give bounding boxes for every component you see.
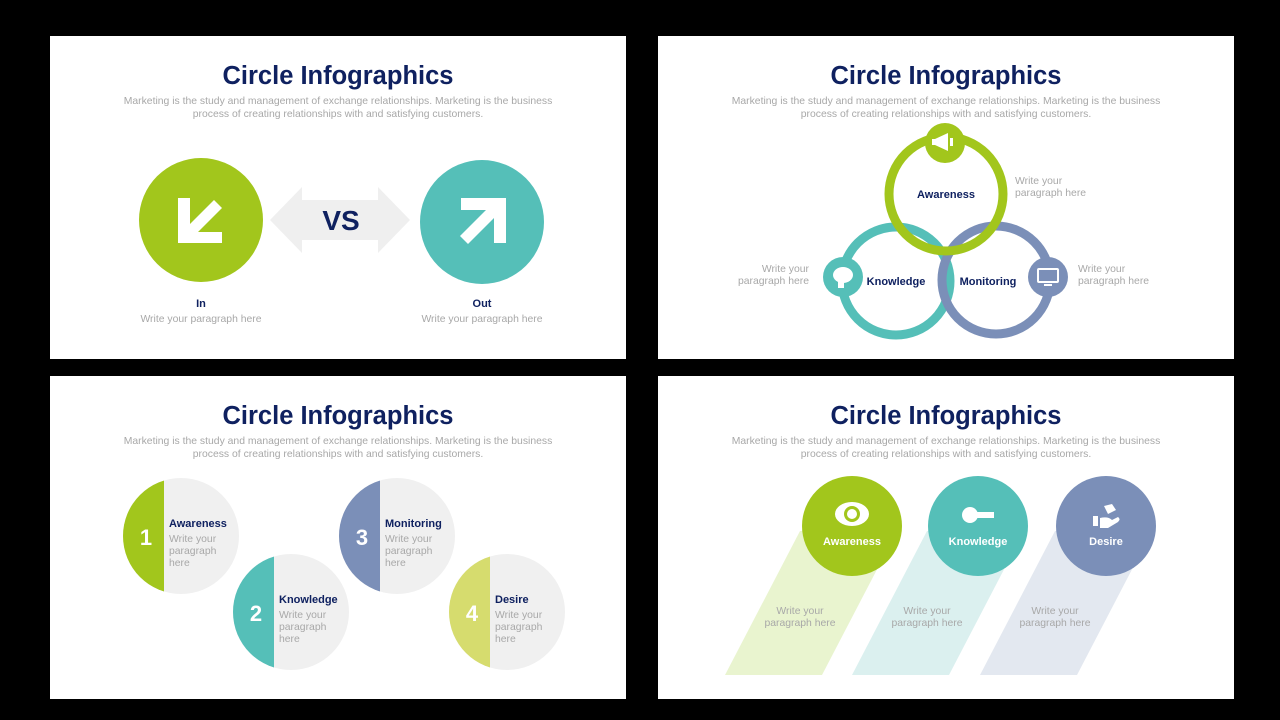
item 1: Awareness — [169, 518, 227, 530]
subtitle — [732, 96, 1160, 120]
item 4: here — [495, 634, 516, 645]
subtitle — [732, 436, 1160, 460]
item 4: 4 — [466, 601, 479, 626]
subtitle: process of creating relationships with and satisfying customers. — [801, 449, 1091, 460]
item 2 — [233, 554, 349, 670]
subtitle: process of creating relationships with and satisfying customers. — [193, 449, 483, 460]
item 2: 2 — [250, 601, 262, 626]
text: right: Write your — [1078, 264, 1126, 275]
column 2: Knowledge — [949, 536, 1007, 548]
label: out — [421, 298, 543, 325]
column 3: paragraph here — [1019, 618, 1091, 629]
item 2: Knowledge — [279, 594, 338, 606]
item 4: paragraph — [495, 622, 543, 633]
label: in: In — [196, 298, 206, 310]
subtitle: process of creating relationships with and satisfying customers. — [801, 109, 1091, 120]
ring: knowledge — [842, 227, 950, 335]
subtitle — [124, 96, 552, 120]
column 3 — [980, 476, 1156, 675]
column 2: paragraph here — [891, 618, 963, 629]
labels — [867, 189, 1016, 288]
title: Circle Infographics — [831, 62, 1061, 90]
label: out: Out — [473, 298, 492, 310]
item 4 — [449, 554, 565, 670]
subtitle: Marketing is the study and management of exchange relationships. Marketing is the business — [124, 436, 552, 447]
text: right top: Write your — [1015, 176, 1063, 187]
text: left: paragraph here — [738, 276, 809, 287]
label: in — [140, 298, 262, 325]
column 2: Write your — [903, 606, 951, 617]
text: right — [1078, 264, 1149, 287]
title: Circle Infographics — [831, 402, 1061, 430]
labels: Monitoring — [960, 276, 1016, 288]
column 1: Write your — [776, 606, 824, 617]
item 3: 3 — [356, 525, 368, 550]
item 1: paragraph — [169, 546, 217, 557]
panel: venn rings — [658, 36, 1234, 359]
text: left: Write your — [762, 264, 810, 275]
item 2: Write your — [279, 610, 327, 621]
column 3: Desire — [1089, 536, 1123, 548]
item 1: Write your — [169, 534, 217, 545]
arrow: double vs arrow — [270, 187, 410, 253]
title: Circle Infographics — [223, 62, 453, 90]
item 3: Write your — [385, 534, 433, 545]
column 1: Awareness — [823, 536, 881, 548]
item 3: paragraph — [385, 546, 433, 557]
item 3 — [339, 478, 455, 594]
text: left — [738, 264, 810, 287]
icon: out circle — [420, 160, 544, 284]
panel: slanted columns — [658, 376, 1234, 699]
subtitle: Marketing is the study and management of exchange relationships. Marketing is the business — [732, 436, 1160, 447]
column 1 — [725, 476, 902, 675]
icon: monitor — [1028, 257, 1068, 297]
ring: awareness — [889, 137, 1003, 251]
arrow: double vs arrow: VS — [322, 205, 360, 236]
item 4: Write your — [495, 610, 543, 621]
item 3: here — [385, 558, 406, 569]
panel: numbered circles — [50, 376, 626, 699]
item 2: here — [279, 634, 300, 645]
panel: in vs out — [50, 36, 626, 359]
ring: monitoring — [942, 226, 1050, 334]
text: right: paragraph here — [1078, 276, 1149, 287]
column 1: paragraph here — [764, 618, 836, 629]
column 3: Write your — [1031, 606, 1079, 617]
label: out: Write your paragraph here — [421, 314, 543, 325]
labels: Awareness — [917, 189, 975, 201]
item 4: Desire — [495, 594, 529, 606]
label: in: Write your paragraph here — [140, 314, 262, 325]
item 1 — [123, 478, 239, 594]
subtitle: Marketing is the study and management of exchange relationships. Marketing is the business — [124, 96, 552, 107]
icon: brain — [823, 257, 863, 297]
item 2: paragraph — [279, 622, 327, 633]
item 1: 1 — [140, 525, 152, 550]
subtitle: process of creating relationships with and satisfying customers. — [193, 109, 483, 120]
column 2 — [852, 476, 1028, 675]
icon: in circle — [139, 158, 263, 282]
subtitle: Marketing is the study and management of exchange relationships. Marketing is the business — [732, 96, 1160, 107]
labels: Knowledge — [867, 276, 925, 288]
title: Circle Infographics — [223, 402, 453, 430]
text: right top — [1015, 176, 1086, 199]
icon: megaphone — [925, 123, 965, 163]
text: right top: paragraph here — [1015, 188, 1086, 199]
subtitle — [124, 436, 552, 460]
item 1: here — [169, 558, 190, 569]
item 3: Monitoring — [385, 518, 442, 530]
